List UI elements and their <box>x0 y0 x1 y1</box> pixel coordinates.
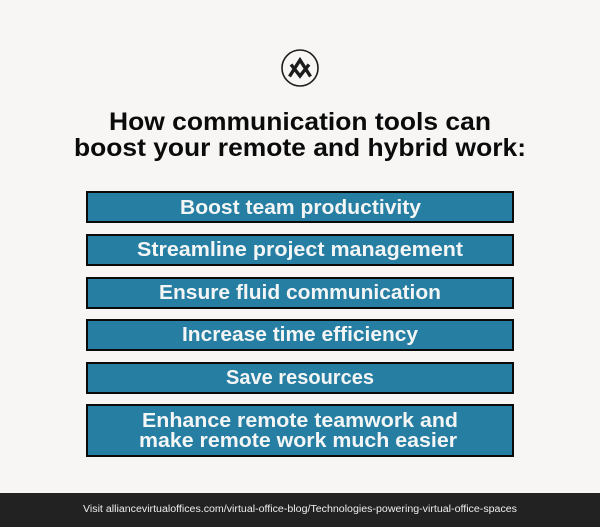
item: save resources: Save resources <box>226 367 374 389</box>
icon: logo <box>282 50 318 86</box>
item: enhance remote teamwork <box>87 405 513 456</box>
item: boost team productivity: Boost team productivity <box>180 197 422 219</box>
item: enhance remote teamwork: make remote work much easier <box>139 430 457 452</box>
item: streamline project management <box>87 235 513 265</box>
item: save resources <box>87 363 513 393</box>
item: increase time efficiency <box>87 320 513 350</box>
footer <box>0 493 600 527</box>
item: ensure fluid communication: Ensure fluid communication <box>159 282 441 304</box>
item: increase time efficiency: Increase time efficiency <box>182 324 419 346</box>
footer: Visit alliancevirtualoffices.com/virtual-office-blog/Technologies-powering-virtual-office-spaces <box>83 504 517 515</box>
title: boost your remote and hybrid work: <box>74 134 526 162</box>
item: streamline project management: Streamline project management <box>137 239 463 261</box>
item: ensure fluid communication <box>87 278 513 308</box>
title: How communication tools can <box>109 108 491 136</box>
item: enhance remote teamwork: Enhance remote teamwork and <box>142 410 458 432</box>
list of benefits <box>87 192 513 456</box>
title <box>74 108 526 162</box>
item: boost team productivity <box>87 192 513 222</box>
